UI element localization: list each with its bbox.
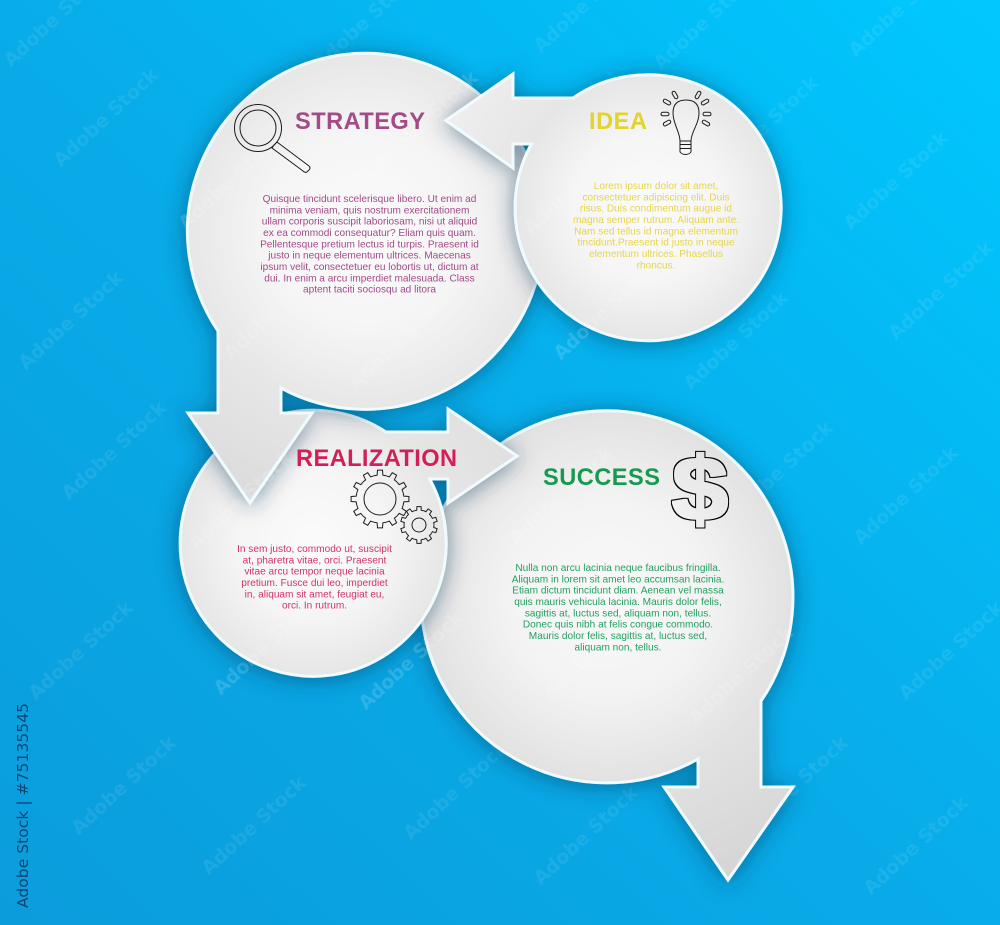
text: success body (512, 563, 724, 653)
text: success body: quis mauris vehicula lacinia. Mauris dolor felis, (514, 597, 722, 608)
stock watermarks: Adobe Stock (49, 64, 163, 171)
stock watermarks: Adobe Stock (57, 397, 171, 504)
stock watermarks: Adobe Stock (67, 732, 181, 839)
text: strategy body: dui. In enim a arcu imperdiet malesuada. Class (264, 273, 475, 284)
text: strategy body (260, 194, 479, 296)
heading: success: SUCCESS (543, 465, 660, 491)
text: strategy body: Pellentesque pretium lectus id turpis. Praesent id (260, 239, 479, 250)
heading: strategy: STRATEGY (295, 109, 425, 135)
stock watermarks: Adobe Stock (724, 417, 838, 524)
watermarks over panels (174, 67, 798, 729)
panel: success (421, 411, 793, 880)
icon: light bulb (661, 91, 711, 154)
watermarks over panels: Adobe Stock (549, 257, 663, 364)
text: idea body: Nam sed tellus id magna elementum (574, 226, 738, 237)
stock watermarks: Adobe Stock (859, 792, 973, 899)
text: success body: sagittis at, luctus sed, aliquam non, tellus. (525, 608, 711, 619)
watermarks over panels: Adobe Stock (519, 132, 633, 239)
text: idea body: consectetuer adipiscing elit. Duis (582, 192, 730, 203)
watermarks over panels: Adobe Stock (209, 592, 323, 699)
watermarks over panels: Adobe Stock (369, 67, 483, 174)
watermarks over panels: Adobe Stock (184, 447, 298, 554)
text: realization body: vitae arcu tempor neque lacinia (244, 567, 385, 578)
watermarks over panels: Adobe Stock (504, 442, 618, 549)
stock watermarks: Adobe Stock (197, 772, 311, 879)
stock watermarks: Adobe Stock (739, 732, 853, 839)
text: idea body: Lorem ipsum dolor sit amet, (594, 181, 718, 192)
text: idea body: risus. Duis condimentum augue id (580, 204, 732, 215)
watermarks over panels: Adobe Stock (174, 127, 288, 234)
icon: dollar sign: $ (672, 440, 728, 540)
panel: strategy (187, 53, 543, 503)
stock watermarks: Adobe Stock (884, 237, 998, 344)
stock id label: Adobe Stock | #75135545 (14, 703, 32, 908)
text: success body: aliquam non, tellus. (575, 642, 661, 653)
text: strategy body: Quisque tincidunt scelerisque libero. Ut enim ad (263, 194, 476, 205)
text: success body: Mauris dolor felis, sagittis at, luctus sed, (529, 631, 707, 642)
watermarks over panels: Adobe Stock (344, 287, 458, 394)
text: success body: Etiam dictum tincidunt diam. Aenean vel massa (512, 586, 724, 597)
watermarks over panels: Adobe Stock (219, 257, 333, 364)
success circle with down arrow (421, 411, 793, 880)
text: strategy body: aptent taciti sociosqu ad litora (303, 285, 436, 296)
watermarks over panels: Adobe Stock (684, 622, 798, 729)
watermarks over panels: Adobe Stock (354, 607, 468, 714)
text: strategy body: ex ea commodi consequatur? Eliam quis quam. (263, 228, 476, 239)
text: realization body: pretium. Fusce dui leo, imperdiet (241, 578, 388, 589)
text: strategy body: ipsum velit, consectetuer eu lobortis ut, dictum at (260, 262, 479, 273)
text: strategy body: justo in neque elementum ultrices. Maecenas (267, 251, 471, 262)
text: strategy body: ullam corporis suscipit laboriosam, nisi ut aliquid (262, 217, 477, 228)
stock watermarks: Adobe Stock (529, 782, 643, 889)
stock watermarks: Adobe Stock (709, 72, 823, 179)
text: realization body: at, pharetra vitae, orci. Praesent (243, 555, 387, 566)
panel: realization (180, 409, 517, 676)
stock watermarks: Adobe Stock (24, 597, 138, 704)
heading: realization: REALIZATION (296, 446, 457, 472)
realization circle with right arrow (180, 409, 517, 676)
icon: gears (351, 470, 438, 543)
text: idea body: tincidunt.Praesent id justo in neque (577, 238, 735, 249)
text: idea body (573, 181, 739, 271)
text: success body: Donec quis nibh at felis congue commodo. (523, 620, 713, 631)
text: idea body: elementum ultrices. Phasellus (589, 249, 723, 260)
strategy circle with down arrow (187, 53, 543, 503)
watermarks over panels: Adobe Stock (539, 597, 653, 704)
text: strategy body: minima veniam, quis nostrum exercitationem (270, 205, 469, 216)
stock watermarks: Adobe Stock (14, 267, 128, 374)
text: realization body (237, 544, 392, 612)
stock watermarks: Adobe Stock (679, 287, 793, 394)
text: idea body: rhoncus. (637, 260, 675, 271)
text: success body: Nulla non arcu lacinia neque faucibus fringilla. (515, 563, 721, 574)
icon: magnifying glass (234, 104, 310, 172)
text: realization body: in, aliquam sit amet, feugiat eu, (245, 589, 384, 600)
stock watermarks: Adobe Stock (839, 127, 953, 234)
heading: idea: IDEA (589, 109, 647, 135)
text: realization body: orci. In rutrum. (282, 601, 347, 612)
stock watermarks: Adobe Stock (399, 737, 513, 844)
idea circle with left arrow (446, 74, 781, 341)
text: idea body: magna semper rutrum. Aliquam ante. (573, 215, 739, 226)
panel: idea (446, 74, 781, 341)
text: realization body: In sem justo, commodo ut, suscipit (237, 544, 392, 555)
stock watermarks: Adobe Stock (849, 442, 963, 549)
text: success body: Aliquam in lorem sit amet leo accumsan lacinia. (512, 574, 724, 585)
